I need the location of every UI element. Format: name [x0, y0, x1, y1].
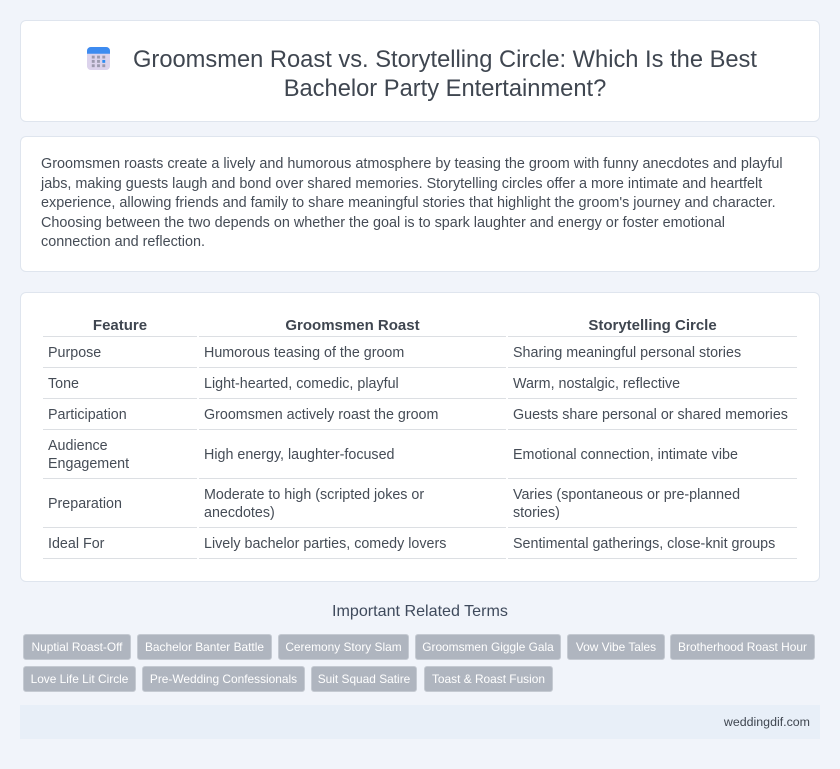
comparison table: Warm, nostalgic, reflective: [513, 376, 680, 392]
intro text: Choosing between the two depends on whether the goal is to spark laughter and energy or foster emotional: [41, 215, 725, 231]
comparison table: Feature: [93, 317, 147, 334]
comparison table: Lively bachelor parties, comedy lovers: [204, 536, 446, 552]
icon: calendar: [87, 47, 110, 70]
related term tags: [23, 634, 815, 692]
related term tags: Groomsmen Giggle Gala: [422, 640, 554, 654]
panel: title header: [20, 20, 820, 122]
comparison table: Storytelling Circle: [588, 317, 717, 334]
related term tags: Bachelor Banter Battle: [145, 640, 264, 654]
title: [133, 47, 757, 102]
comparison table: Varies (spontaneous or pre-planned: [513, 487, 740, 503]
comparison table: Purpose: [48, 345, 101, 361]
related term tags: Brotherhood Roast Hour: [678, 640, 807, 654]
comparison table: Groomsmen actively roast the groom: [204, 407, 438, 423]
related term tags: Pre-Wedding Confessionals: [150, 672, 297, 686]
comparison table: Engagement: [48, 456, 129, 472]
comparison table: Light-hearted, comedic, playful: [204, 376, 399, 392]
comparison table: Humorous teasing of the groom: [204, 345, 404, 361]
comparison table: Emotional connection, intimate vibe: [513, 447, 738, 463]
related term tags: Vow Vibe Tales: [576, 640, 656, 654]
comparison table: High energy, laughter-focused: [204, 447, 394, 463]
panel: introduction: [20, 136, 820, 272]
related term tags: Ceremony Story Slam: [285, 640, 402, 654]
comparison table: Audience: [48, 438, 108, 454]
comparison table: [43, 317, 797, 559]
intro text: [40, 156, 783, 250]
title: Groomsmen Roast vs. Storytelling Circle: Which Is the Best: [133, 47, 757, 73]
heading: related terms: Important Related Terms: [332, 602, 508, 620]
comparison table: Moderate to high (scripted jokes or: [204, 487, 424, 503]
intro text: connection and reflection.: [41, 234, 205, 250]
comparison table: Sentimental gatherings, close-knit groups: [513, 536, 775, 552]
comparison table: Guests share personal or shared memories: [513, 407, 788, 423]
comparison table: stories): [513, 505, 560, 521]
intro text: experience, allowing friends and family to share meaningful stories that highlight the groom's journey and character.: [41, 195, 776, 211]
comparison table: Groomsmen Roast: [285, 317, 420, 334]
intro text: jabs, making guests laugh and bond over shared memories. Storytelling circles offer a more intimate and heartfelt: [41, 176, 762, 192]
footer bar: [20, 705, 820, 739]
comparison table: Sharing meaningful personal stories: [513, 345, 741, 361]
related term tags: Nuptial Roast-Off: [32, 640, 122, 654]
intro text: Groomsmen roasts create a lively and humorous atmosphere by teasing the groom with funny anecdotes and playful: [41, 156, 783, 172]
related term tags: Toast & Roast Fusion: [432, 672, 545, 686]
comparison table: Ideal For: [48, 536, 104, 552]
panel: comparison table: [20, 292, 820, 582]
footer source: weddingdif.com: [724, 715, 810, 729]
related term tags: Love Life Lit Circle: [31, 672, 128, 686]
comparison table: Participation: [48, 407, 127, 423]
related term tags: Suit Squad Satire: [318, 672, 410, 686]
comparison table: Preparation: [48, 496, 122, 512]
comparison table: Tone: [48, 376, 79, 392]
comparison table: anecdotes): [204, 505, 275, 521]
title: Bachelor Party Entertainment?: [284, 76, 606, 102]
